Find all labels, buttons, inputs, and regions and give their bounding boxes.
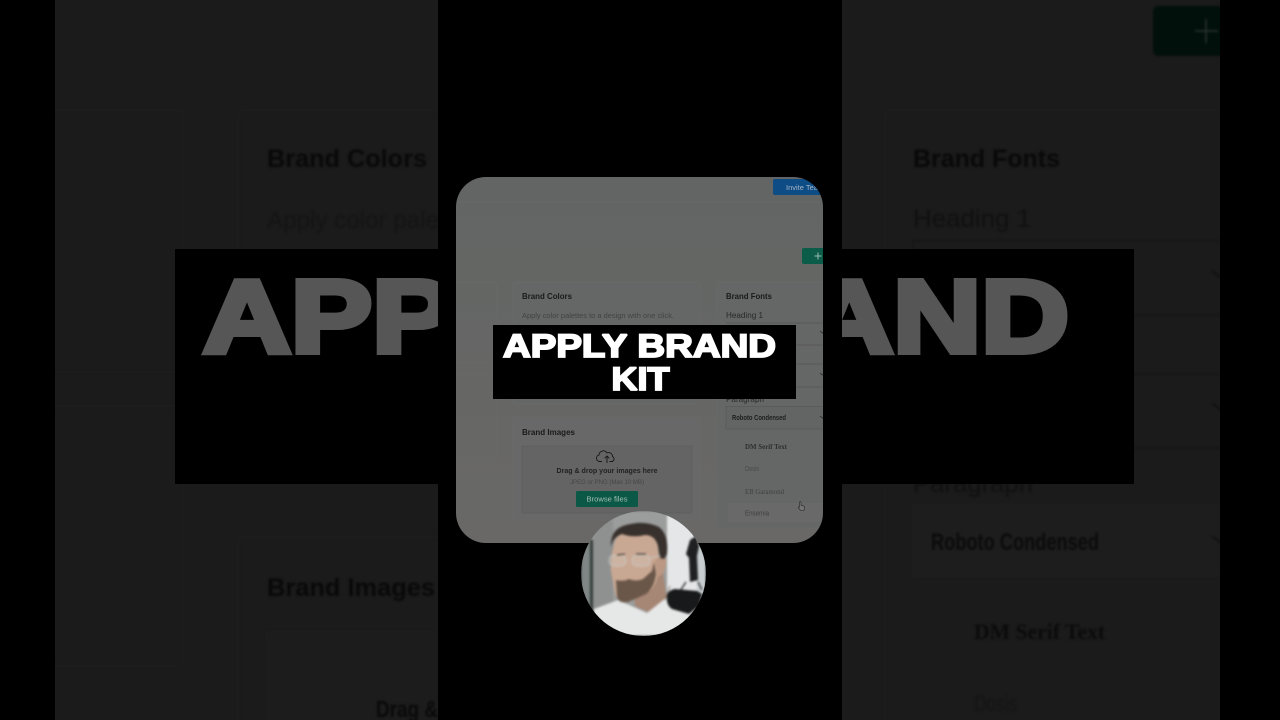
panel: brand fonts: Paragraph bbox=[726, 394, 764, 404]
icon: cloud upload bbox=[596, 451, 614, 463]
panel: blurred right backdrop: Brand Fonts bbox=[913, 145, 1060, 173]
panel: brand fonts bbox=[726, 293, 823, 516]
panel: brand fonts: Brand Fonts bbox=[726, 291, 772, 301]
panel: brand fonts: Heading 1 bbox=[726, 310, 763, 320]
panel: blurred right backdrop bbox=[842, 0, 1245, 720]
button: invite team: Invite Team bbox=[786, 183, 824, 192]
dropzone: JPEG or PNG (Max 10 MB) bbox=[570, 479, 644, 486]
panel: brand kit app screenshot card bbox=[456, 177, 847, 543]
icon: hand cursor bbox=[798, 502, 804, 510]
dropdown: font options: Ensemia bbox=[745, 510, 769, 518]
panel: brand images bbox=[522, 429, 692, 514]
button: browse files: Browse files bbox=[586, 494, 628, 504]
panel: blurred left backdrop: Brand Colors bbox=[267, 145, 427, 173]
panel: brand colors: Apply color palettes to a design with one click. bbox=[522, 311, 674, 320]
panel: blurred left backdrop bbox=[40, 0, 458, 720]
panel: brand colors bbox=[522, 293, 674, 320]
panel: blurred right backdrop: DM Serif Text bbox=[974, 619, 1106, 644]
select: roboto condensed bbox=[726, 331, 826, 429]
title: apply brand kit: APPLY BRAND bbox=[503, 328, 776, 364]
dropzone bbox=[522, 446, 692, 513]
button: green add bbox=[802, 248, 823, 264]
dropdown: font options: EB Garamond bbox=[745, 488, 784, 496]
title: apply brand kit bbox=[493, 325, 796, 399]
center column: black strip bbox=[438, 0, 842, 720]
button: browse files bbox=[576, 491, 638, 507]
panel: blurred right backdrop: Dosis bbox=[974, 691, 1017, 716]
select: roboto condensed: Roboto Condensed bbox=[732, 413, 786, 422]
dropzone: Drag & drop your images here bbox=[556, 466, 658, 475]
panel: brand images: Brand Images bbox=[522, 427, 575, 437]
title: apply brand kit: KIT bbox=[612, 361, 670, 397]
panel: blurred right backdrop: Paragraph bbox=[913, 470, 1033, 498]
panel: brand colors: Brand Colors bbox=[522, 291, 572, 301]
band: large blurred title backdrop bbox=[175, 249, 1134, 484]
dropdown: font options: Dosis bbox=[745, 466, 759, 473]
portrait: presenter in circle bbox=[581, 511, 706, 636]
dropdown: font options bbox=[745, 444, 787, 516]
dropdown: font options: DM Serif Text bbox=[745, 443, 788, 451]
panel: blurred left backdrop: Apply color pale bbox=[267, 207, 439, 234]
panel: left partial cards bbox=[456, 282, 497, 456]
button: invite team bbox=[773, 179, 824, 195]
panel: blurred left backdrop: Brand Images bbox=[267, 574, 435, 602]
panel: blurred right backdrop: Roboto Condensed bbox=[931, 529, 1099, 556]
band: large blurred title backdrop: APPLY BRAND bbox=[203, 259, 1069, 374]
panel: blurred right backdrop: Heading 1 bbox=[913, 205, 1031, 233]
